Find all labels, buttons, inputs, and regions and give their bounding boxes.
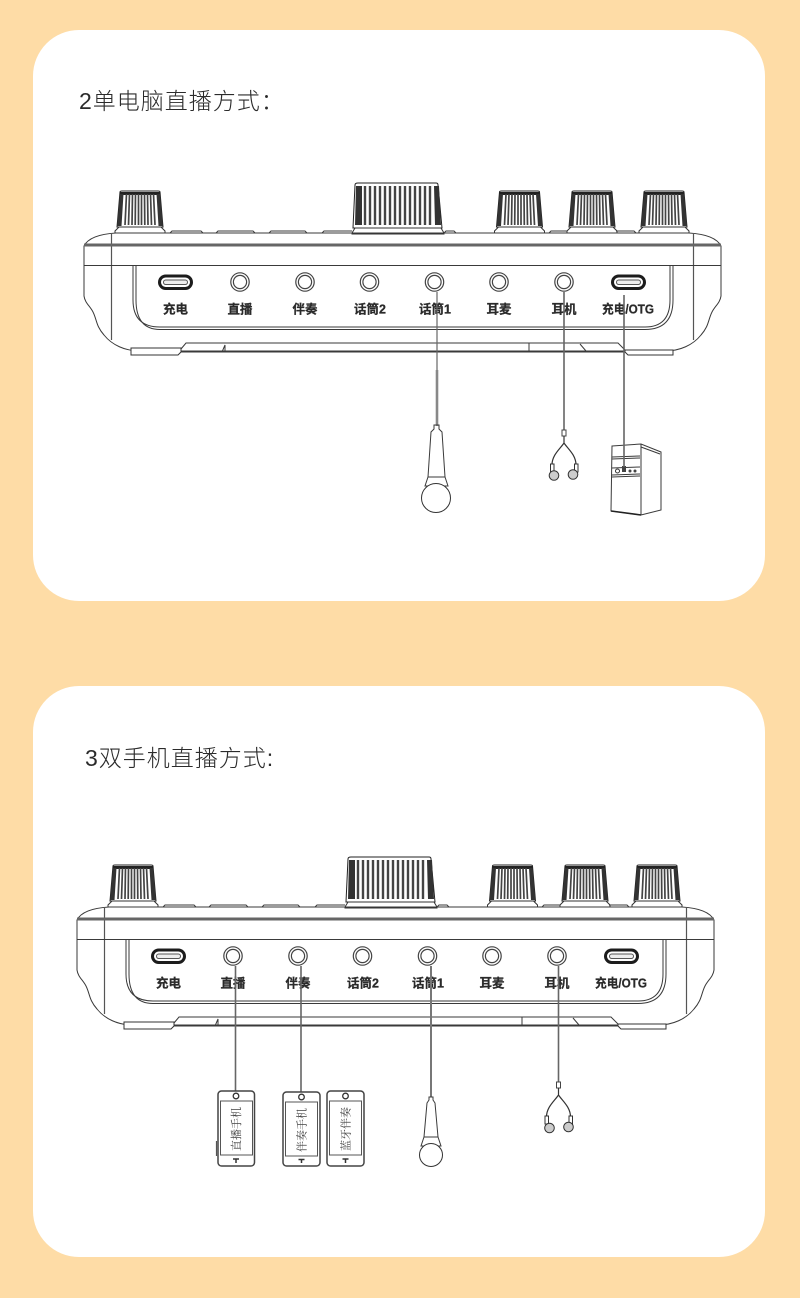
knob: right 1 — [494, 191, 544, 233]
cable: earphones — [558, 966, 560, 1082]
icon: microphone — [422, 425, 450, 512]
cable: microphone lower — [436, 370, 438, 426]
knob: right 1 — [488, 865, 538, 907]
panel: dual phone live streaming — [33, 686, 765, 1257]
knob: right 2 — [560, 865, 610, 907]
port: headphones — [548, 947, 566, 965]
knob: left — [108, 865, 158, 907]
port labels — [156, 976, 647, 990]
icon: earphones — [545, 1082, 573, 1133]
port: charge USB-C — [160, 276, 192, 288]
title: dual phone: 3双手机直播方式: — [85, 745, 274, 771]
icon: phone bluetooth accompaniment — [327, 1091, 364, 1166]
port labels: 话筒2 — [354, 302, 386, 316]
icon: phone accompaniment — [283, 1092, 320, 1166]
cable: accompaniment phone — [300, 966, 302, 1092]
knob: left — [115, 191, 165, 233]
knob: right 3 — [639, 191, 689, 233]
port labels — [163, 302, 654, 316]
port labels: 伴奏 — [292, 302, 318, 316]
icon: phone live — [216, 1091, 254, 1166]
port: charge USB-C — [152, 950, 184, 962]
port labels: 充电 — [156, 976, 181, 990]
icon: phone bluetooth accompaniment: 蓝牙伴奏 — [338, 1107, 352, 1151]
icon: microphone — [420, 1097, 442, 1166]
title: single computer: 2单电脑直播方式： — [79, 88, 285, 114]
panel: single computer live streaming — [33, 30, 765, 601]
port: mic 1 — [418, 947, 437, 965]
port labels: 充电 — [163, 302, 188, 316]
icon: phone live: 直播手机 — [229, 1107, 243, 1151]
port labels: 伴奏 — [285, 976, 311, 990]
knob: right 3 — [632, 865, 682, 907]
port: mic 2 — [360, 273, 379, 291]
port labels: 耳机 — [551, 302, 577, 316]
sound card device — [77, 857, 714, 1029]
cable: computer — [623, 295, 625, 467]
cable: earphones — [563, 292, 565, 430]
device body — [84, 231, 721, 355]
port labels: 耳麦 — [486, 302, 512, 316]
port labels: 充电/OTG — [595, 976, 647, 990]
port: mic 1 — [425, 273, 444, 291]
port labels: 话筒2 — [347, 976, 379, 990]
port: headphones — [555, 273, 573, 291]
port labels: 充电/OTG — [602, 302, 654, 316]
port labels: 耳麦 — [479, 976, 505, 990]
port labels: 直播 — [220, 976, 246, 990]
icon: earphones — [549, 430, 578, 480]
cable: live phone — [234, 966, 236, 1091]
port labels: 话筒1 — [419, 302, 451, 316]
port: headset — [483, 947, 501, 965]
knob: large volume — [345, 857, 437, 908]
sound card device — [84, 183, 721, 355]
port: accompaniment — [289, 947, 307, 965]
port: live — [224, 947, 242, 965]
port: live — [231, 273, 249, 291]
device body — [77, 905, 714, 1029]
icon: desktop computer — [611, 444, 661, 515]
port labels: 耳机 — [544, 976, 570, 990]
knob: large volume — [352, 183, 444, 234]
icon: phone accompaniment: 伴奏手机 — [294, 1108, 308, 1152]
port: charge OTG USB-C — [606, 950, 638, 962]
cable: microphone — [436, 292, 438, 370]
knob: right 2 — [567, 191, 617, 233]
port: charge OTG USB-C — [612, 276, 644, 288]
port labels: 话筒1 — [412, 976, 444, 990]
port: accompaniment — [296, 273, 314, 291]
port labels: 直播 — [227, 302, 253, 316]
port: mic 2 — [353, 947, 372, 965]
port: headset — [490, 273, 508, 291]
cable: microphone — [430, 966, 432, 1097]
